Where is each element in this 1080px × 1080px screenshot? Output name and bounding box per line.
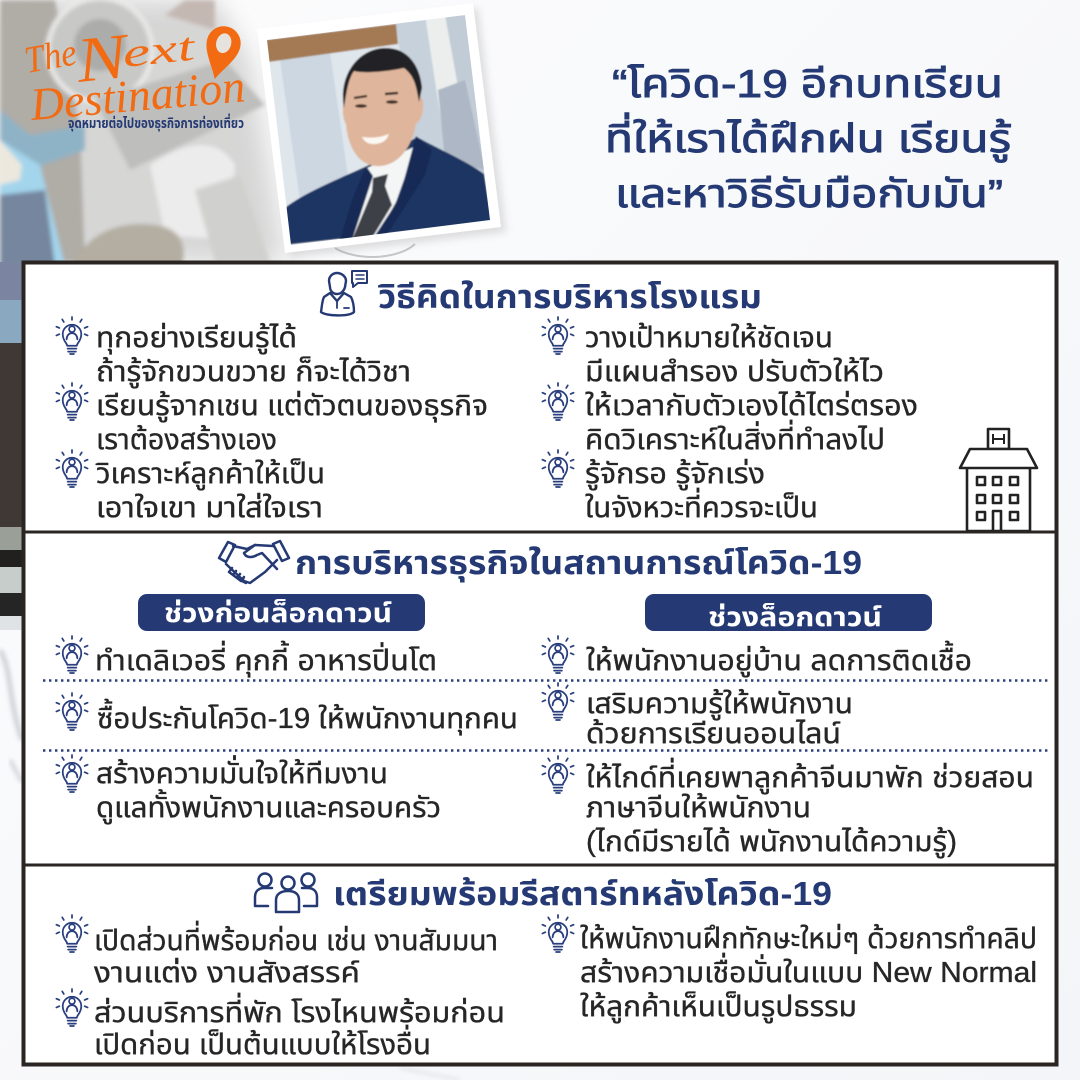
list: before lockdown items: ดูแลทั้งพนักงานและครอบครัว [96,789,441,825]
logo: The Next Destination: Destination [27,60,247,130]
list: restart left column [56,915,505,1061]
list: during lockdown items: ให้พนักงานอยู่บ้าน ลดการติดเชื้อ [586,640,972,678]
quote heading: “โควิด-19 อีกบทเรียน [612,63,1003,106]
pill: before lockdown [138,594,425,631]
list: restart left column: งานแต่ง งานสังสรรค์ [94,957,360,989]
icon: location pin [198,23,244,83]
list: mindset right column [542,317,918,524]
panel: restart preparation [56,874,1037,1061]
list: before lockdown items: ซื้อประกันโควิด-19 ให้พนักงานทุกคน [97,698,518,735]
quote heading: และหาวิธีรับมือกับมัน” [615,173,1003,216]
list: mindset right column: มีแผนสำรอง ปรับตัวให้ไว [585,356,884,388]
heading: restart preparation: เตรียมพร้อมรีสตาร์ทหลังโควิด-19 [333,875,832,912]
list: mindset left column: เอาใจเขา มาใส่ใจเรา [96,492,323,524]
list: restart right column: สร้างความเชื่อมั่นในแบบ New Normal [580,952,1037,989]
list: during lockdown items: ให้ไกด์ที่เคยพาลูกค้าจีนมาพัก ช่วยสอน [586,757,1034,795]
list: during lockdown items: ด้วยการเรียนออนไลน์ [586,718,841,750]
heading: hotel management mindset: วิธีคิดในการบริหารโรงแรม [378,278,762,315]
divider [24,864,1056,866]
quote heading: ที่ให้เราได้ฝึกฝน เรียนรู้ [605,112,1011,162]
list: mindset right column: ให้เวลากับตัวเองได้ไตร่ตรอง [585,390,918,422]
list: restart left column: ส่วนบริการที่พัก โรงไหนพร้อมก่อน [94,992,505,1029]
logo: The Next Destination: ext [120,24,198,76]
list: mindset left column: ทุกอย่างเรียนรู้ได้ [96,322,297,355]
list: during lockdown items: ภาษาจีนให้พนักงาน [586,792,811,824]
list: mindset right column: ในจังหวะที่ควรจะเป็น [585,487,818,524]
list: before lockdown items: ทำเดลิเวอรี่ คุกกี้ อาหารปิ่นโต [95,640,437,677]
list: mindset left column: เรียนรู้จากเชน แต่ตัวตนของธุรกิจ [96,390,488,423]
icon: hotel building [960,429,1037,531]
icon: handshake [219,541,289,583]
quote heading [605,63,1011,216]
list: mindset right column: วางเป้าหมายให้ชัดเจน [585,322,833,354]
list: during lockdown items: เสริมความรู้ให้พนักงาน [586,688,853,721]
icon: person with speech bubble [321,271,367,315]
list: mindset right column: รู้จักรอ รู้จักเร่ง [585,458,765,491]
logo: The Next Destination: จุดหมายต่อไปของธุรกิจการท่องเที่ยว [68,113,244,132]
logo: The Next Destination: The [21,31,80,82]
photo frame: portrait of hotelier [250,0,510,260]
list: mindset left column: ถ้ารู้จักขวนขวาย ก็จะได้วิชา [96,356,411,389]
list: restart right column [542,915,1037,1024]
list: mindset left column: วิเคราะห์ลูกค้าให้เป็น [96,458,325,491]
list: restart left column: เปิดส่วนที่พร้อมก่อน เช่น งานสัมมนา [94,920,498,957]
heading: business management: การบริหารธุรกิจในสถานการณ์โควิด-19 [295,544,862,583]
list: restart left column: เปิดก่อน เป็นต้นแบบให้โรงอื่น [94,1024,431,1061]
icon: magnifier edge behind the frame [335,244,415,257]
list: during lockdown items: (ไกด์มีรายได้ พนักงานได้ความรู้) [586,826,957,859]
panel: hotel management mindset [56,271,1037,531]
list: mindset left column: เราต้องสร้างเอง [96,424,277,456]
logo: The Next Destination [21,20,247,132]
icon: group of people [255,874,317,912]
list: restart right column: ให้ลูกค้าเห็นเป็นรูปธรรม [580,991,857,1024]
list: before lockdown items: สร้างความมั่นใจให้ทีมงาน [96,755,388,790]
main panel frame [24,262,1056,1064]
pill: during lockdown [645,594,932,632]
pill: during lockdown: ช่วงล็อกดาวน์ [708,602,882,632]
list: mindset right column: คิดวิเคราะห์ในสิ่งที่ทำลงไป [585,419,885,456]
panel: business management during COVID-19 [43,541,1048,859]
divider [24,530,1056,534]
pill: before lockdown: ช่วงก่อนล็อกดาวน์ [164,598,392,628]
list: restart right column: ให้พนักงานฝึกทักษะใหม่ๆ ด้วยการทำคลิป [580,923,1037,955]
logo: The Next Destination: N [72,20,134,96]
list: mindset left column [56,317,488,524]
list: during lockdown items [542,636,1034,859]
list: before lockdown items [56,636,518,825]
background photo: travel gear collage [0,0,285,630]
